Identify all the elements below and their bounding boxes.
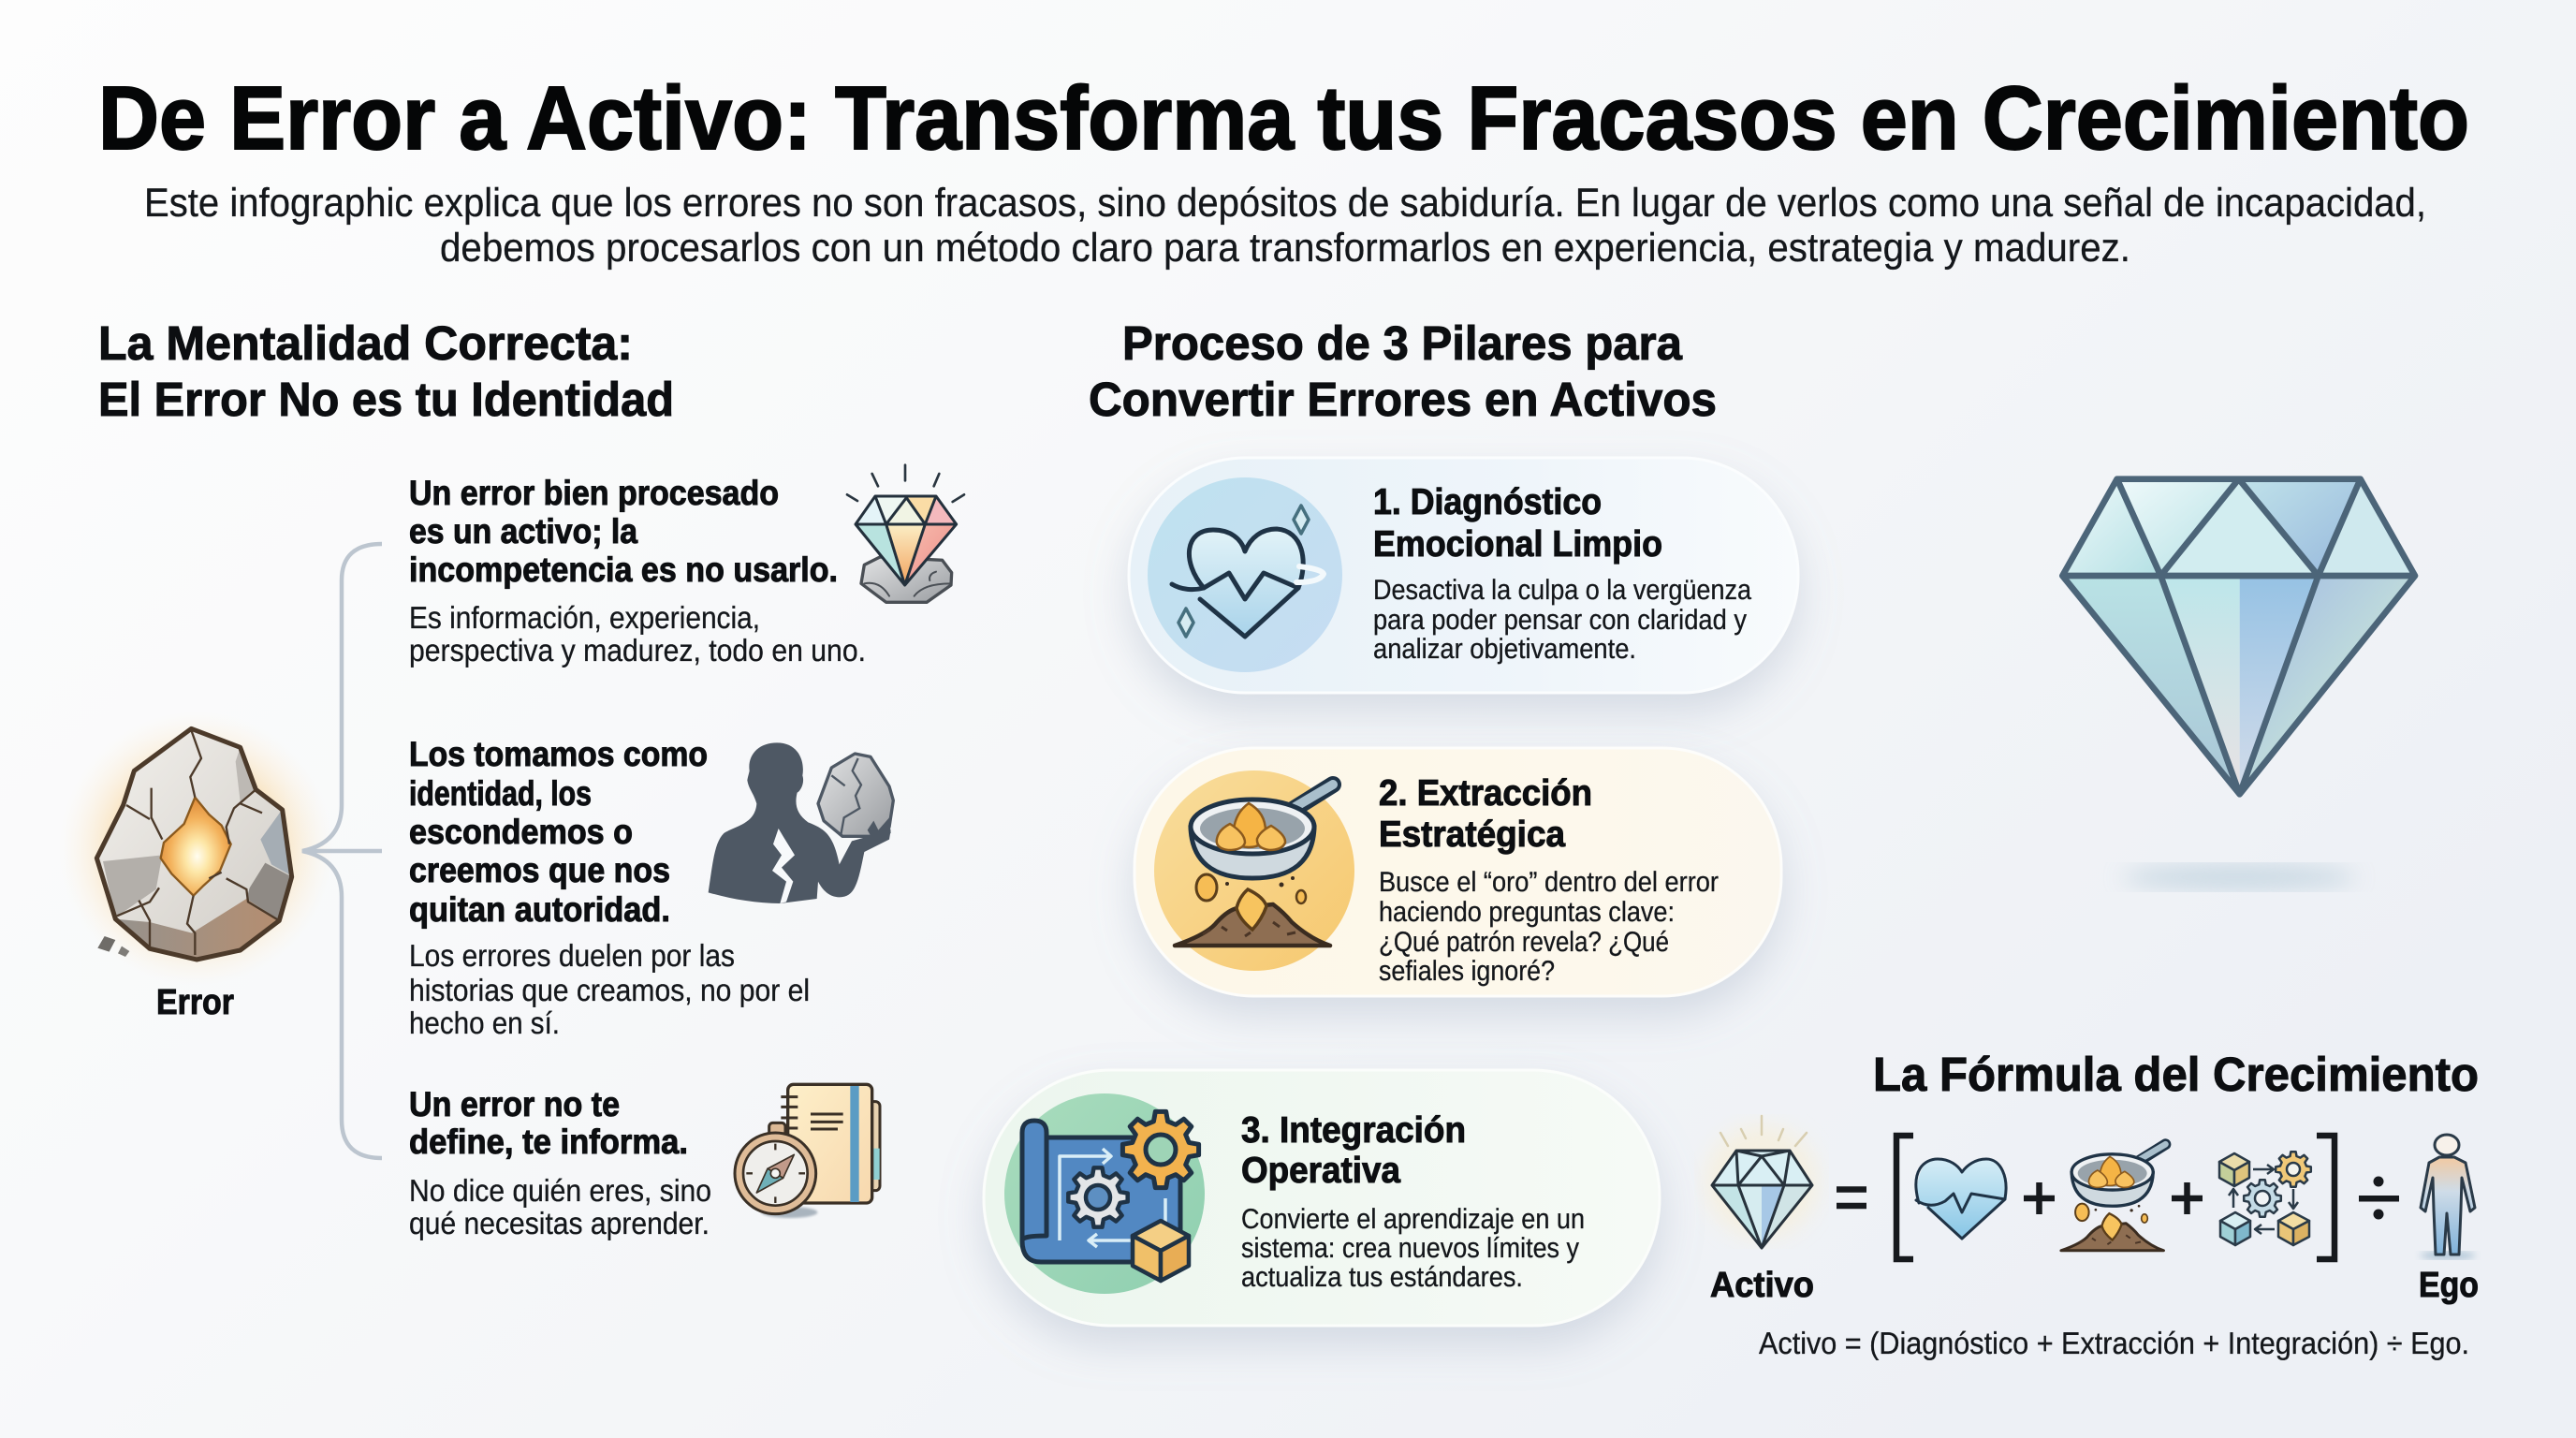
heading: la fórmula del crecimiento: La Fórmula del Crecimiento — [1873, 1048, 2479, 1101]
icon: mini integration flow — [2219, 1152, 2311, 1245]
block 1: activo — [409, 474, 866, 668]
text: diagnóstico: para poder pensar con claridad y — [1373, 605, 1747, 636]
icon: heart with pulse — [1172, 506, 1324, 637]
block 2: identidad: historias que creamos, no por el — [409, 973, 810, 1007]
label: Activo: Activo — [1710, 1266, 1814, 1305]
text: extracción: 2. Extracción — [1379, 773, 1592, 814]
block 2: identidad — [409, 735, 810, 1040]
icon: silhouette holding rock — [709, 742, 893, 903]
text: extracción: haciendo preguntas clave: — [1379, 897, 1675, 928]
icon: ego person — [2420, 1135, 2476, 1259]
equals sign — [1837, 1189, 1866, 1206]
left bracket — [1896, 1136, 1913, 1259]
block 3: informa: No dice quién eres, sino — [409, 1173, 711, 1208]
icon: activo diamond — [1705, 1116, 1818, 1248]
label: Error: Error — [156, 983, 234, 1022]
icon: gold pan — [1175, 785, 1333, 946]
block 2: identidad: identidad, los — [409, 774, 592, 813]
icon: diamond on rock — [847, 465, 964, 602]
text: extracción — [1379, 773, 1719, 987]
panel: pillar 2 — [1134, 748, 1781, 996]
subtitle: Este infographic explica que los errores no son fracasos, sino depósitos de sabiduría. En lugar de verlos como una señal de incapacidad, — [144, 181, 2426, 226]
text: extracción: Busce el “oro” dentro del error — [1379, 867, 1719, 898]
text: diagnóstico: Emocional Limpio — [1373, 524, 1662, 565]
block 2: identidad: escondemos o — [409, 813, 633, 851]
text: integración — [1241, 1110, 1585, 1293]
block 3: informa: define, te informa. — [409, 1123, 688, 1161]
panel: pillar 1 — [1129, 458, 1798, 693]
subtitle: debemos procesarlos con un método claro para transformarlos en experiencia, estrategia y madurez. — [440, 226, 2130, 271]
icon: mini gold pan — [2061, 1144, 2165, 1251]
plus sign — [2024, 1182, 2055, 1214]
icon: large diamond — [2062, 479, 2415, 889]
icon: compass and notebook — [735, 1084, 880, 1218]
label: Ego: Ego — [2419, 1266, 2479, 1305]
text: integración: actualiza tus estándares. — [1241, 1262, 1523, 1293]
text: integración: sistema: crea nuevos límites y — [1241, 1233, 1579, 1264]
heading: proceso de 3 pilares: Proceso de 3 Pilares para — [1122, 316, 1683, 370]
heading: proceso de 3 pilares: Convertir Errores en Activos — [1089, 373, 1717, 426]
block 3: informa: qué necesitas aprender. — [409, 1206, 710, 1240]
text: diagnóstico — [1373, 482, 1751, 665]
block 2: identidad: creemos que nos — [409, 851, 670, 889]
text: extracción: sefiales ignoré? — [1379, 956, 1555, 987]
formula text: Activo = (Diagnóstico + Extracción + Integración) ÷ Ego. — [1759, 1326, 2469, 1360]
block 2: identidad: hecho en sí. — [409, 1005, 560, 1040]
block 1: activo: es un activo; la — [409, 512, 637, 550]
text: integración: Operativa — [1241, 1151, 1400, 1191]
block 3: informa — [409, 1085, 711, 1240]
formula: equation row — [1705, 1116, 2476, 1259]
heading: proceso de 3 pilares — [1089, 316, 1717, 426]
text: integración: Convierte el aprendizaje en un — [1241, 1204, 1585, 1235]
divide sign — [2359, 1176, 2399, 1219]
text: diagnóstico: analizar objetivamente. — [1373, 634, 1636, 665]
right bracket — [2317, 1136, 2334, 1259]
block 2: identidad: quitan autoridad. — [409, 890, 670, 929]
block 1: activo: Es información, experiencia, — [409, 600, 760, 635]
subtitle — [144, 181, 2426, 271]
title: De Error a Activo: Transforma tus Fracasos en Crecimiento — [98, 68, 2469, 169]
block 1: activo: perspectiva y madurez, todo en uno. — [409, 633, 866, 668]
block 1: activo: Un error bien procesado — [409, 474, 779, 512]
text: diagnóstico: Desactiva la culpa o la vergüenza — [1373, 575, 1751, 606]
panel: pillar 3 — [984, 1070, 1660, 1326]
block 2: identidad: Los tomamos como — [409, 735, 708, 773]
plus sign — [2172, 1182, 2203, 1214]
block 3: informa: Un error no te — [409, 1085, 620, 1123]
block 1: activo: incompetencia es no usarlo. — [409, 550, 838, 589]
bracket connector — [302, 544, 382, 1158]
text: integración: 3. Integración — [1241, 1110, 1466, 1151]
block 2: identidad: Los errores duelen por las — [409, 938, 735, 973]
heading: la mentalidad correcta: El Error No es tu Identidad — [98, 373, 674, 426]
text: diagnóstico: 1. Diagnóstico — [1373, 482, 1602, 522]
text: extracción: Estratégica — [1379, 814, 1565, 855]
text: extracción: ¿Qué patrón revela? ¿Qué — [1379, 927, 1669, 958]
icon: blueprint with gears and cube — [1022, 1111, 1199, 1281]
heading: la mentalidad correcta: La Mentalidad Correcta: — [98, 316, 633, 370]
icon: mini heart — [1916, 1159, 2007, 1239]
heading: la mentalidad correcta — [98, 316, 674, 426]
icon: cracked rock with glow — [59, 712, 334, 986]
